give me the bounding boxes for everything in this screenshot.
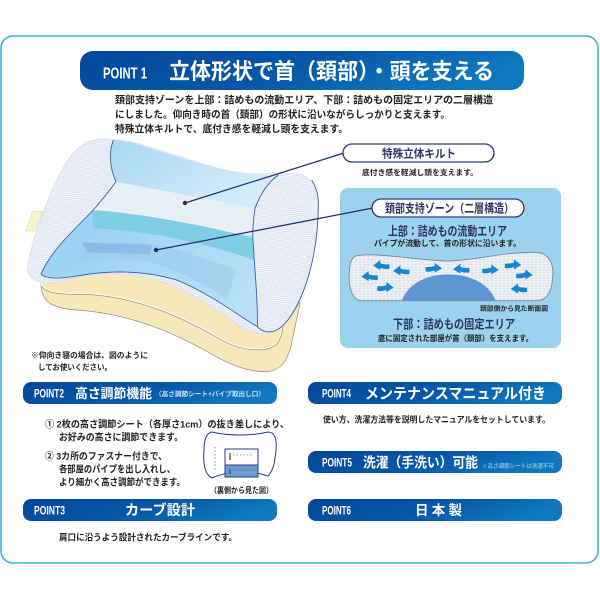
zone outline (41, 140, 278, 327)
lower height sheet (41, 263, 300, 372)
note: supine use: してお使いください。 (38, 362, 112, 372)
heading bar: POINT 5: 洗濯（手洗い）可能 (363, 454, 478, 470)
POINT 2 text block: ② 3カ所のファスナー付きで、 (45, 450, 167, 462)
note: supine use (31, 350, 148, 372)
heading bar: POINT 4: POINT4 (322, 388, 351, 400)
POINT 2 text block: お好みの高さに調節できます。 (59, 432, 183, 444)
heading bar: POINT 5 (308, 451, 562, 473)
heading bar: POINT 1 (80, 51, 524, 90)
heading bar: POINT 1: 立体形状で首（頚部）・頭を支える (169, 59, 494, 84)
callout: head support zone label: 頚部支持ゾーン（二層構造） (385, 200, 514, 216)
POINT 4 text: 使い方、洗濯方法等を説明したマニュアルをセットしています。 (323, 414, 550, 424)
head support zone (37, 137, 283, 330)
heading bar: POINT 3: カーブ設計 (125, 502, 195, 518)
heading bar: POINT 6: POINT6 (322, 506, 351, 518)
cross-section caption: 頚部側から見た断面図 (480, 304, 549, 312)
lower part description: 底に固定された部屋が首（頚部）を支えます。 (378, 333, 533, 343)
callout leader: head support zone (154, 208, 373, 252)
heading bar: POINT 3 (23, 499, 277, 521)
callout: special quilt (343, 144, 494, 162)
callout description: special quilt: 底付き感を軽減し頭を支えます。 (362, 167, 478, 177)
upper part heading: 上部：詰めもの流動エリア (388, 224, 507, 238)
lower part heading: 下部：詰めもの固定エリア (393, 316, 515, 332)
heading bar: POINT 2 (23, 382, 277, 404)
heading bar: POINT 2: 高さ調節機能 (75, 386, 152, 401)
pillow illustration (26, 137, 318, 372)
pillow outer edge (257, 180, 318, 332)
heading bar: POINT 6 (308, 499, 562, 521)
heading bar: POINT 2: （高さ調節シート+パイプ取出し口） (155, 389, 265, 398)
POINT 2 text block: より細かく高さ調節ができます。 (59, 476, 185, 488)
heading bar: POINT 5: ※高さ調節シートは洗濯不可 (482, 462, 554, 470)
intro text block: 頚部支持ゾーンを上部：詰めもの流動エリア、下部：詰めもの固定エリアの二層構造 (115, 94, 493, 106)
callout: special quilt: 特殊立体キルト (382, 146, 456, 160)
POINT 2 text block: ① 2枚の高さ調節シート（各厚さ1cm）の抜き差しにより、 (45, 418, 289, 430)
heading bar: POINT 3: POINT3 (34, 506, 65, 518)
cross-section diagram (349, 252, 553, 301)
panel: head support zone (340, 188, 561, 348)
pillow body (27, 139, 318, 334)
diagram: pillow rear view (204, 432, 276, 495)
heading bar: POINT 2: POINT2 (34, 388, 64, 400)
height tag (26, 211, 43, 231)
callout: head support zone label (372, 199, 524, 217)
upper height sheet (42, 263, 283, 349)
note: supine use: ※仰向き寝の場合は、図のように (31, 350, 148, 360)
diagram: pillow rear view: （裏側から見た図） (210, 485, 273, 495)
callout leader: quilt (183, 153, 344, 205)
intro text block: にしました。仰向き時の首（頚部）の形状に沿いながらしっかりと支えます。 (115, 108, 450, 121)
POINT 2 text block: 各部屋のパイプを出し入れし、 (59, 464, 175, 476)
intro text block (115, 94, 493, 136)
POINT 2 text block (45, 418, 289, 488)
heading bar: POINT 1: POINT 1 (103, 66, 147, 82)
intro text block: 特殊立体キルトで、底付き感を軽減し頭を支えます。 (115, 122, 348, 136)
upper part description: パイプが流動して、首の形状に沿います。 (374, 238, 521, 248)
POINT 3 text: 肩口に沿うよう設計されたカーブラインです。 (59, 532, 237, 542)
heading bar: POINT 4: メンテナンスマニュアル付き (365, 386, 546, 402)
heading bar: POINT 6: 日本製 (415, 502, 462, 518)
heading bar: POINT 4 (308, 382, 562, 404)
heading bar: POINT 5: POINT5 (322, 458, 352, 470)
